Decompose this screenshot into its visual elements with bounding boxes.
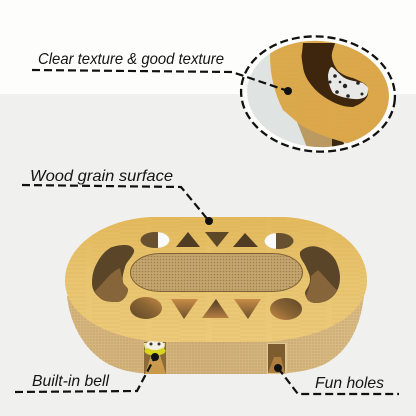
leader line: clear texture <box>32 70 292 95</box>
magnified detail circle <box>240 35 396 153</box>
callout: fun holes <box>274 364 399 394</box>
heading: fun holes: Fun holes <box>315 375 384 392</box>
heading: bell: Built-in bell <box>32 373 109 390</box>
leader line: wood grain <box>22 185 213 225</box>
side opening: fun hole <box>267 343 287 374</box>
leader line: fun holes <box>274 364 399 394</box>
inset dashed ring <box>237 31 399 157</box>
background: lower grey band <box>0 94 416 416</box>
callout: bell <box>15 353 159 392</box>
inset backdrop <box>237 31 399 157</box>
inset image <box>247 40 389 148</box>
left kidney hole <box>92 245 134 302</box>
callout: wood grain <box>22 168 213 225</box>
board side wall <box>67 296 364 374</box>
right kidney hole <box>300 246 340 303</box>
product: cat scratching board <box>65 217 367 374</box>
leader line: bell <box>15 353 159 392</box>
icon: bell toy <box>144 340 166 356</box>
icon: perforated ball <box>328 67 368 99</box>
centre scratching pad <box>130 253 303 292</box>
side opening: bell <box>144 340 166 374</box>
background: upper white band <box>0 0 416 94</box>
heading: clear texture: Clear texture & good texture <box>38 51 224 68</box>
top row holes <box>140 232 294 249</box>
heading: wood grain: Wood grain surface <box>30 168 173 185</box>
board top surface <box>65 217 367 342</box>
bottom row holes <box>130 297 302 320</box>
callout: clear texture <box>32 51 292 95</box>
